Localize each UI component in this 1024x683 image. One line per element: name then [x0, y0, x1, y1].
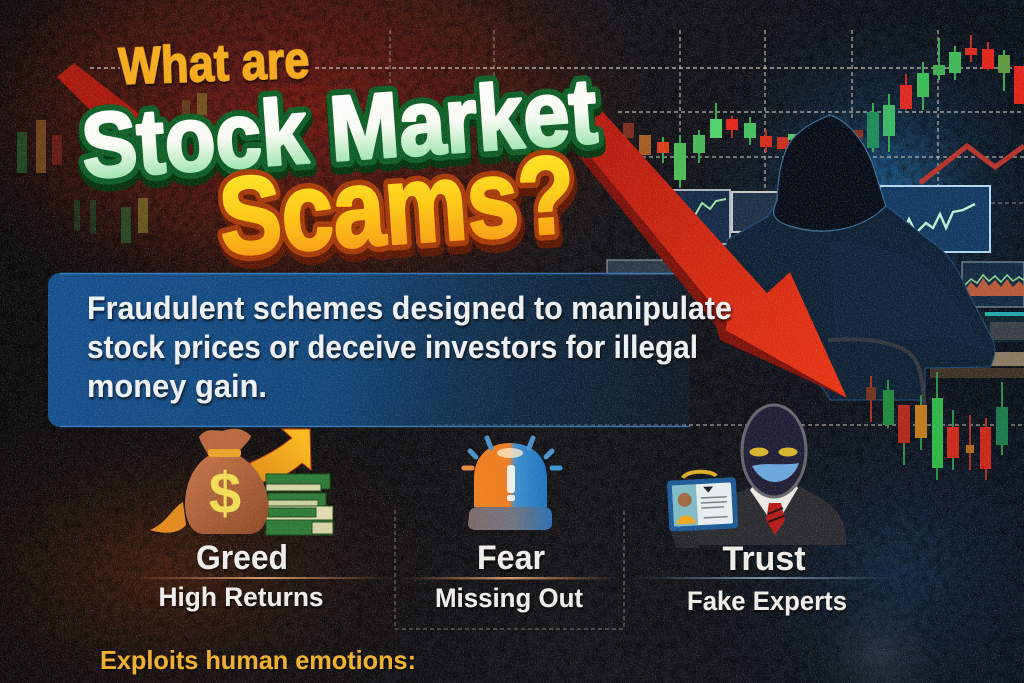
caption: exploits human emotions: Exploits human emotions:: [100, 645, 416, 675]
title line: Scams?: Scams?: [215, 133, 579, 279]
hooded hacker figure: [726, 115, 995, 400]
icon: masked fake expert with ID badge: [667, 405, 846, 548]
label: Greed: [158, 539, 324, 612]
label: Trust: Trust: [722, 540, 806, 578]
icon: alarm siren: [464, 438, 560, 530]
label: Fear: [435, 539, 583, 613]
title line: What are: What are: [117, 31, 310, 96]
candlestick chart: upper: [623, 35, 1024, 187]
definition text: [87, 290, 732, 404]
title: [78, 31, 601, 286]
big red falling arrow: [556, 100, 847, 398]
title line: Scams?: Scams?: [218, 139, 581, 286]
icon: money bag with rising arrow and cash: [150, 429, 333, 535]
title line: Scams?: Scams?: [215, 133, 579, 279]
definition text: stock prices or deceive investors for illegal: [87, 329, 698, 365]
label: Greed: High Returns: [158, 582, 324, 612]
label: Trust: Fake Experts: [687, 586, 847, 616]
arrow tail segment: [57, 63, 160, 150]
label: Trust: [687, 540, 847, 616]
trading monitors: [607, 186, 1024, 378]
office chair: [828, 339, 925, 425]
candlestick chart: lower: [866, 372, 1008, 480]
title line: Stock Market: Stock Market: [78, 60, 600, 198]
panel: definition box: [48, 273, 690, 427]
label: Greed: Greed: [196, 539, 288, 577]
definition text: Fraudulent schemes designed to manipulate: [87, 290, 732, 326]
dashed chart grid: [90, 30, 1024, 629]
title line: Stock Market: Stock Market: [79, 66, 601, 204]
label: Fear: Fear: [477, 539, 545, 577]
faded candlesticks left: [17, 93, 207, 243]
divider lines: [130, 577, 900, 579]
icon: money bag with rising arrow and cash: $: [209, 461, 241, 526]
definition text: money gain.: [87, 368, 267, 404]
label: Fear: Missing Out: [435, 583, 583, 613]
title line: Stock Market: Stock Market: [78, 60, 600, 198]
red trend line: [920, 146, 1024, 183]
